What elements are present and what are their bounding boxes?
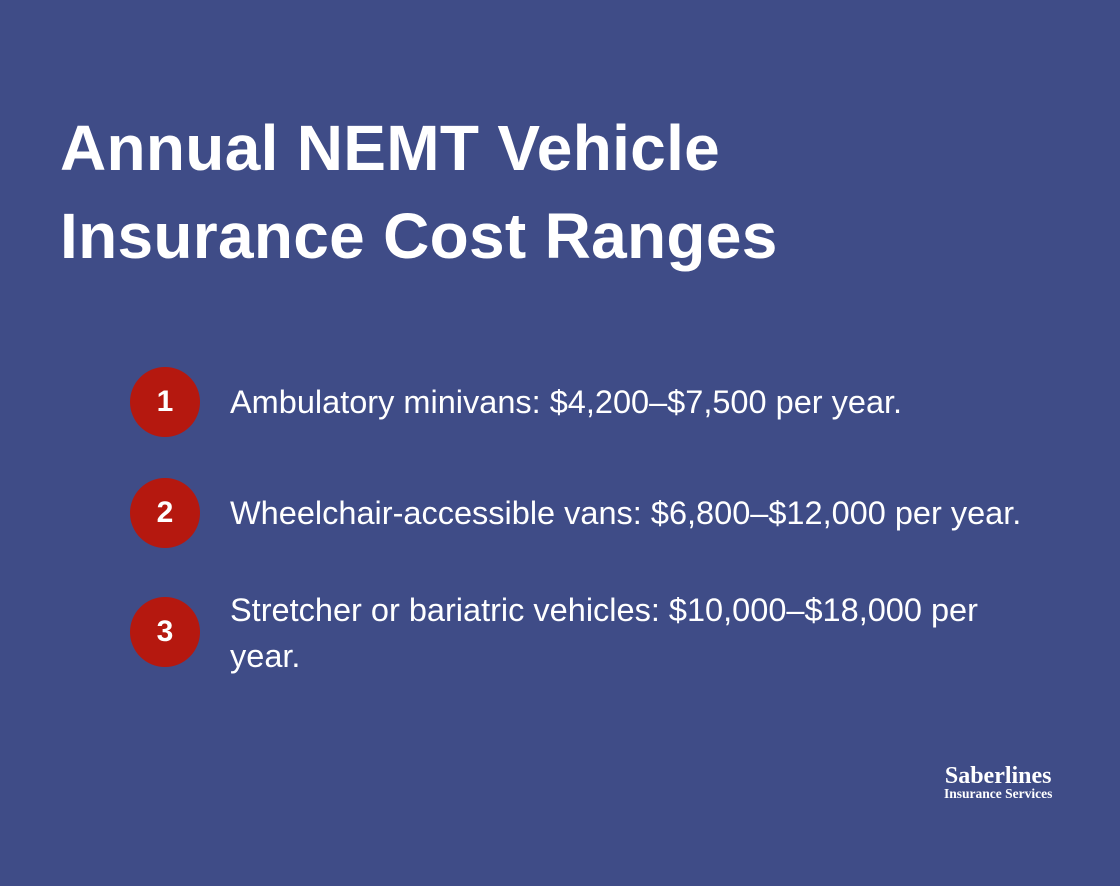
item 1 [130,367,902,437]
logo: Insurance Services [944,786,1052,801]
badge 2: 2 [157,496,173,529]
item 3 [130,592,978,674]
badge 1: 1 [157,385,173,418]
badge 3: 3 [157,615,173,648]
badge 2 [130,478,200,548]
title: Annual NEMT Vehicle [60,112,720,184]
item 2 [130,478,1021,548]
title: Insurance Cost Ranges [60,200,778,272]
logo: Saberlines [945,763,1052,789]
text 2: Wheelchair-accessible vans: $6,800–$12,000 per year. [230,495,1021,531]
text 3: Stretcher or bariatric vehicles: $10,000–$18,000 per year. [230,592,978,674]
title [60,112,778,272]
badge 3 [130,597,200,667]
logo [944,763,1052,801]
text 1: Ambulatory minivans: $4,200–$7,500 per year. [230,384,902,420]
badge 1 [130,367,200,437]
